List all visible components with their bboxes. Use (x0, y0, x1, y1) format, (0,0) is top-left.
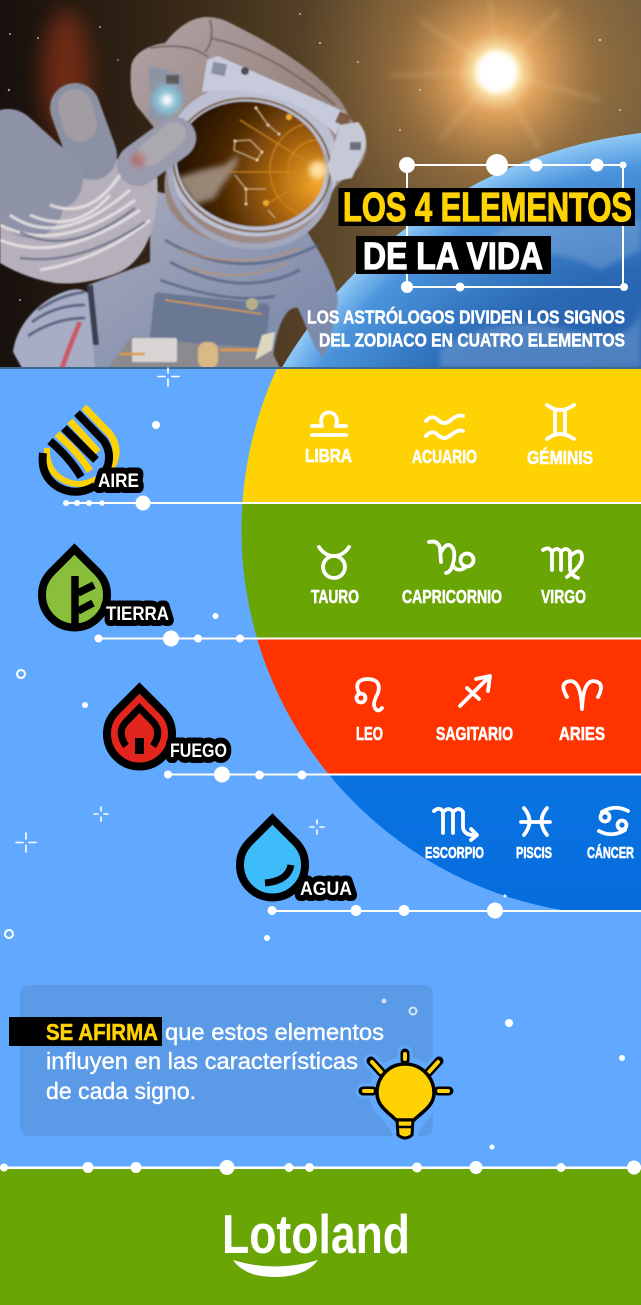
sign: piscis (516, 808, 552, 862)
sign: acuario: ACUARIO (412, 447, 477, 467)
lower neck ring (167, 145, 333, 250)
stars (8, 13, 621, 321)
title frame with nodes (399, 154, 628, 293)
sign: sagitario: SAGITARIO (436, 724, 513, 744)
title: DE LA VIDA (363, 236, 543, 278)
background sparkles and dots (5, 368, 625, 1150)
sign: libra: LIBRA (305, 446, 352, 466)
sign: escorpio (425, 809, 484, 862)
visor (176, 100, 330, 228)
helmet dome (131, 17, 367, 245)
sign: tauro: TAURO (311, 587, 359, 607)
logo: lotoland: Lotoland (222, 1203, 410, 1265)
sign: escorpio: ESCORPIO (425, 845, 484, 862)
lamp glare (152, 85, 182, 115)
connector line: aire (63, 496, 641, 510)
lens flare red (42, 10, 90, 140)
subtitle (307, 306, 625, 350)
zodiac wheel (230, 118, 318, 214)
element: tierra icon and label (42, 549, 169, 627)
sun (328, 0, 641, 188)
hero bottom edge (0, 367, 641, 369)
side unit left with lamp (148, 65, 184, 124)
callout text: de cada signo. (46, 1078, 196, 1104)
sign: geminis (527, 405, 593, 468)
chest hardware (108, 336, 280, 368)
element: aire icon and label: AIRE (98, 471, 139, 492)
sign: cancer (587, 808, 634, 862)
sign: libra (305, 412, 352, 466)
sign: virgo (541, 548, 586, 607)
element: aire icon and label (43, 407, 139, 492)
highlight tag (9, 1017, 162, 1046)
icon: light bulb (363, 1053, 449, 1142)
element: agua icon and label: AGUA (300, 879, 352, 900)
space background (0, 0, 641, 368)
callout text (46, 1019, 384, 1104)
element: fuego icon and label (107, 688, 227, 766)
torso (88, 190, 338, 368)
sign: virgo: VIRGO (541, 587, 586, 607)
sign: sagitario (436, 676, 513, 744)
astronaut (0, 17, 367, 368)
element: tierra icon and label: TIERRA (106, 604, 169, 625)
sign: capricornio (402, 542, 502, 607)
side unit right (328, 122, 366, 182)
visor reflection (176, 155, 238, 205)
chest pack (150, 292, 270, 348)
callout panel (9, 985, 433, 1136)
connector line: tierra (94, 630, 641, 646)
constellations (234, 108, 279, 218)
callout text: influyen en las características (46, 1048, 358, 1074)
sign: acuario (412, 416, 477, 467)
sign: aries: ARIES (559, 724, 605, 744)
callout text: que estos elementos (165, 1019, 384, 1045)
title (338, 184, 635, 278)
sign: capricornio: CAPRICORNIO (402, 587, 502, 607)
helmet details (211, 62, 227, 76)
planet earth (282, 133, 641, 367)
connector line: fuego (164, 766, 641, 782)
connector line: agua (268, 902, 641, 918)
leg (13, 289, 100, 368)
element: fuego icon and label: FUEGO (170, 741, 227, 762)
sign: tauro (311, 547, 359, 607)
sign: aries (559, 681, 605, 744)
hero photo: astronaut in space (0, 0, 641, 367)
highlight tag: SE AFIRMA (46, 1019, 158, 1045)
sign: leo: LEO (356, 724, 383, 744)
helmet collar band (166, 90, 337, 238)
sign: leo (356, 679, 383, 744)
sign: piscis: PISCIS (516, 845, 552, 862)
glove fingers and palm (0, 106, 175, 284)
quarter circle colour bands (200, 369, 641, 910)
element: agua icon and label (240, 819, 352, 900)
footer green band (0, 1168, 641, 1305)
footer divider with nodes (0, 1160, 641, 1175)
sign: geminis: GÉMINIS (527, 447, 593, 468)
